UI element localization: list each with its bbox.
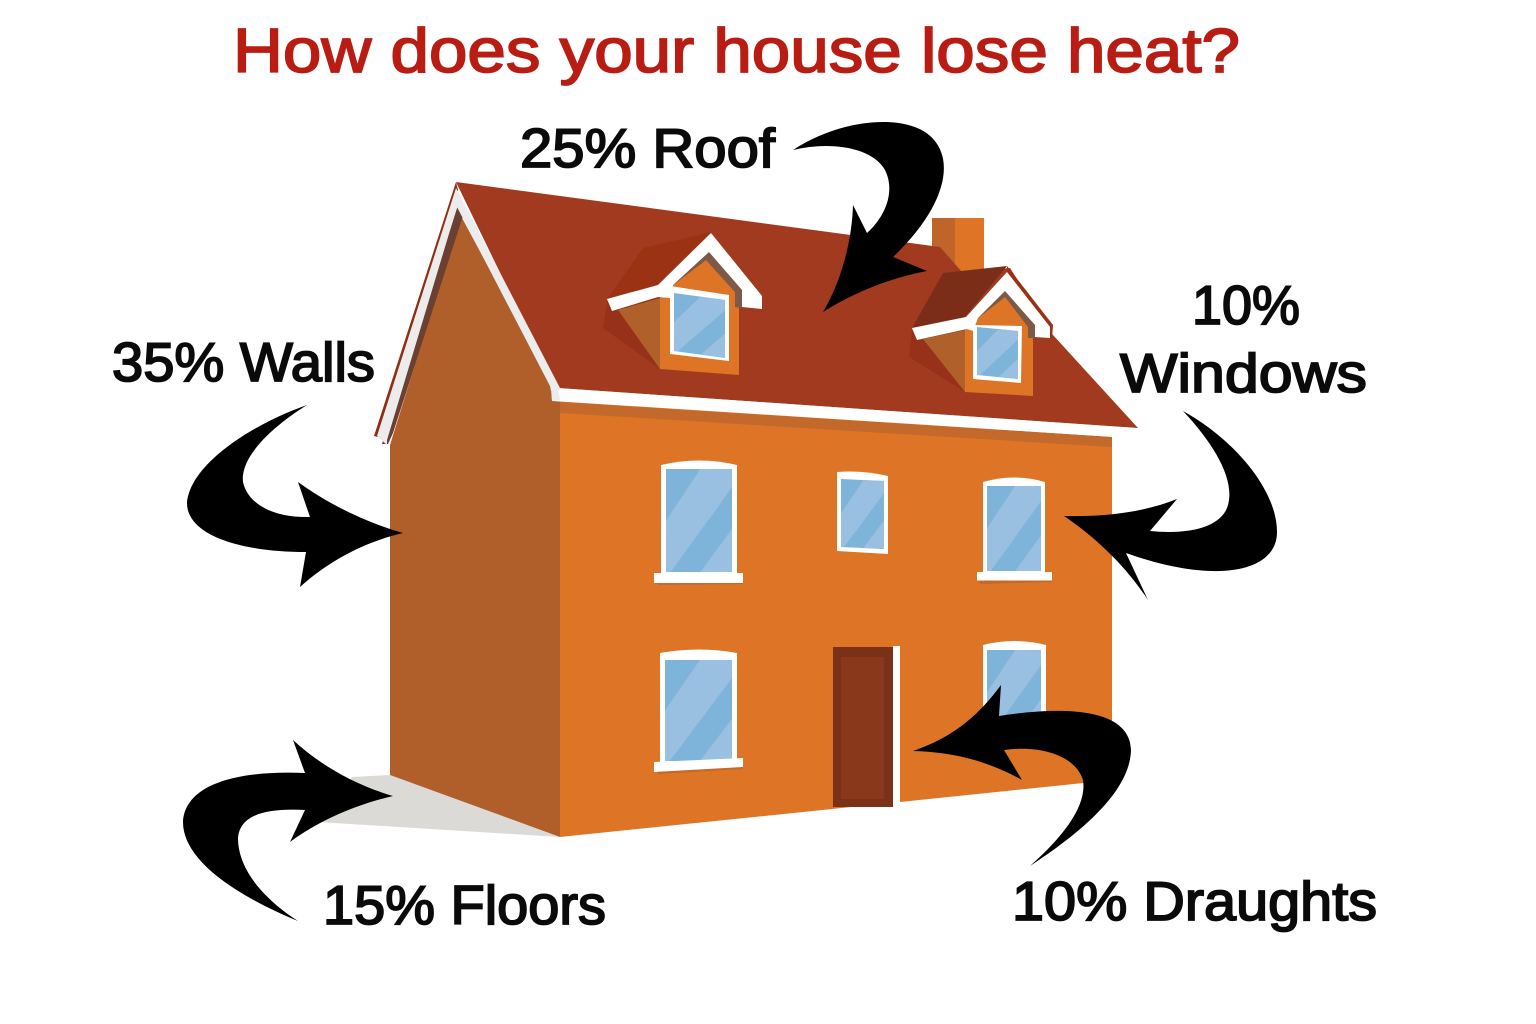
- dormer right: [909, 266, 1053, 396]
- window upper middle: [837, 472, 888, 554]
- eave shadow: [560, 402, 1112, 447]
- side wall: [390, 216, 560, 837]
- label: windows: 10%: [1192, 274, 1300, 336]
- roof: [456, 182, 1138, 428]
- arrow: draughts: [913, 685, 1131, 866]
- eave board: [551, 388, 1135, 437]
- arrow: walls: [187, 405, 403, 587]
- chimney: [932, 218, 984, 272]
- house illustration: [318, 182, 1138, 837]
- gable trim: [374, 182, 560, 445]
- window upper right: [977, 478, 1052, 584]
- door: [833, 646, 900, 807]
- arrow: roof: [793, 122, 944, 312]
- window lower left: [654, 650, 743, 774]
- label: walls: 35% Walls: [112, 331, 375, 393]
- ground shadow: [318, 775, 560, 837]
- label: floors: 15% Floors: [323, 874, 606, 936]
- front wall: [560, 400, 1112, 837]
- window upper left: [654, 460, 743, 585]
- arrow: windows: [1064, 411, 1277, 600]
- dormer left: [603, 232, 762, 375]
- window lower right: [983, 641, 1046, 716]
- title: How does your house lose heat?: [233, 17, 1240, 86]
- label: roof: 25% Roof: [520, 117, 776, 179]
- label: windows: Windows: [1120, 342, 1367, 404]
- arrow: floors: [183, 740, 393, 921]
- label: windows: [1120, 274, 1367, 404]
- label: draughts: 10% Draughts: [1012, 870, 1377, 932]
